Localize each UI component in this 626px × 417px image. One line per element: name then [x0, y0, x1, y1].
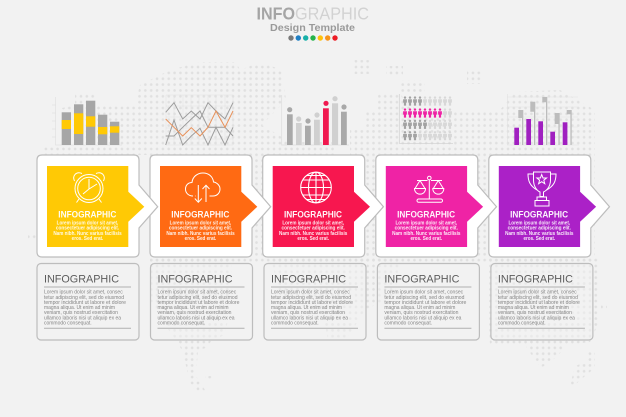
panel: step 1 card — [37, 155, 158, 257]
box text: magna aliqua. Ut enim ad minim — [271, 305, 342, 311]
panel: text box 4 — [377, 264, 479, 340]
panel: step 3 card — [263, 155, 383, 257]
step text: Nam nibh. Nunc varius facilisis — [166, 231, 235, 237]
box text: ullamco laboris nisi ut aliquip ex ea — [44, 315, 121, 321]
step text: consectetuer adipiscing elit. — [282, 226, 345, 232]
icon: scales — [414, 176, 444, 202]
title: INFO — [256, 4, 295, 24]
box text: magna aliqua. Ut enim ad minim — [44, 305, 115, 311]
step text: Lorem ipsum dolor sit amet, — [282, 220, 345, 226]
step text — [505, 220, 574, 242]
box text: magna aliqua. Ut enim ad minim — [498, 305, 569, 311]
step text: consectetuer adipiscing elit. — [508, 226, 572, 232]
box text: commodo consequat. — [498, 320, 546, 326]
box text: Lorem ipsum dolor sit amet, consec — [271, 290, 350, 296]
box text: tetur adipiscing elit, sed do eiusmod — [44, 295, 124, 301]
step text: eros. Sed erat. — [72, 236, 104, 242]
box text: ullamco laboris nisi ut aliquip ex ea — [271, 315, 348, 321]
box text: tempor incididunt ut labore et dolore — [384, 300, 467, 306]
panel: text box 3 — [264, 264, 366, 340]
box text — [158, 290, 240, 326]
icon: globe — [301, 172, 331, 203]
step text — [166, 220, 235, 242]
box text: tempor incididunt ut labore et dolore — [498, 300, 580, 306]
title: GRAPHIC — [295, 4, 369, 24]
step text: consectetuer adipiscing elit. — [169, 226, 233, 232]
step text — [392, 220, 461, 242]
box text: veniam, quis nostrud exercitation — [498, 310, 572, 316]
colour dots — [288, 35, 338, 41]
step heading: INFOGRAPHIC — [397, 210, 456, 220]
step text: Nam nibh. Nunc varius facilisis — [392, 231, 461, 237]
box text: tetur adipiscing elit, sed do eiusmod — [384, 295, 464, 301]
box text: Lorem ipsum dolor sit amet, consec — [384, 290, 463, 296]
box text: veniam, quis nostrud exercitation — [271, 310, 345, 316]
dotted world map background — [28, 60, 607, 393]
box text — [44, 290, 126, 326]
box text: Lorem ipsum dolor sit amet, consec — [158, 290, 237, 296]
step text: Nam nibh. Nunc varius facilisis — [279, 231, 348, 237]
box text — [498, 290, 580, 326]
box text: tetur adipiscing elit, sed do eiusmod — [498, 295, 578, 301]
step text: Lorem ipsum dolor sit amet, — [170, 220, 232, 226]
step text: eros. Sed erat. — [523, 236, 556, 242]
step heading: INFOGRAPHIC — [284, 210, 342, 220]
step text — [279, 220, 348, 242]
box text: commodo consequat. — [158, 320, 205, 326]
box heading: INFOGRAPHIC — [44, 273, 119, 285]
box text — [271, 290, 353, 326]
box heading: INFOGRAPHIC — [498, 273, 573, 285]
box heading: INFOGRAPHIC — [271, 273, 346, 285]
step text: eros. Sed erat. — [185, 236, 217, 242]
subtitle: Design Template — [270, 23, 355, 34]
icon: alarm clock — [74, 173, 104, 202]
box text: commodo consequat. — [384, 320, 432, 326]
chart: line chart — [166, 95, 233, 145]
box text: ullamco laboris nisi ut aliquip ex ea — [158, 315, 235, 321]
title — [256, 4, 369, 24]
box text: veniam, quis nostrud exercitation — [44, 310, 118, 316]
icon: cloud with arrows — [186, 173, 220, 202]
panel: step 2 card — [150, 155, 271, 257]
box text: tetur adipiscing elit, sed do eiusmod — [271, 295, 351, 301]
step text: consectetuer adipiscing elit. — [395, 226, 459, 232]
box heading: INFOGRAPHIC — [384, 273, 459, 285]
step heading: INFOGRAPHIC — [58, 210, 117, 220]
box text: tempor incididunt ut labore et dolore — [44, 300, 126, 306]
box text: Lorem ipsum dolor sit amet, consec — [498, 290, 577, 296]
chart: people pictogram — [399, 94, 453, 143]
step text: consectetuer adipiscing elit. — [56, 226, 120, 232]
box text: tempor incididunt ut labore et dolore — [158, 300, 240, 306]
box text: tempor incididunt ut labore et dolore — [271, 300, 353, 306]
box text: tetur adipiscing elit, sed do eiusmod — [158, 295, 238, 301]
chart: stacked bars — [52, 97, 122, 145]
panel: step 5 card — [489, 155, 610, 257]
box text: ullamco laboris nisi ut aliquip ex ea — [384, 315, 461, 321]
step text: Nam nibh. Nunc varius facilisis — [505, 231, 574, 237]
panel: text box 1 — [37, 264, 139, 340]
step heading: INFOGRAPHIC — [171, 210, 230, 220]
panel: text box 2 — [150, 264, 252, 340]
box text: magna aliqua. Ut enim ad minim — [158, 305, 228, 311]
box text — [384, 290, 467, 326]
chart: purple bars with flags — [507, 94, 579, 145]
step text: Lorem ipsum dolor sit amet, — [57, 220, 119, 226]
step heading: INFOGRAPHIC — [510, 210, 569, 220]
chart: lollipop bars — [282, 95, 349, 145]
box text: veniam, quis nostrud exercitation — [158, 310, 232, 316]
box text: commodo consequat. — [44, 320, 92, 326]
step text: Lorem ipsum dolor sit amet, — [395, 220, 458, 226]
box text: magna aliqua. Ut enim ad minim — [384, 305, 455, 311]
panel: text box 5 — [491, 264, 593, 340]
icon: trophy — [528, 172, 556, 206]
step text: Nam nibh. Nunc varius facilisis — [53, 231, 122, 237]
step text: eros. Sed erat. — [297, 236, 330, 242]
step text: Lorem ipsum dolor sit amet, — [508, 220, 571, 226]
step text — [53, 220, 122, 242]
box text: veniam, quis nostrud exercitation — [384, 310, 459, 316]
panel: step 4 card — [376, 155, 496, 257]
box heading: INFOGRAPHIC — [158, 273, 233, 285]
box text: Lorem ipsum dolor sit amet, consec — [44, 290, 123, 296]
box text: commodo consequat. — [271, 320, 319, 326]
box text: ullamco laboris nisi ut aliquip ex ea — [498, 315, 575, 321]
step text: eros. Sed erat. — [410, 236, 443, 242]
